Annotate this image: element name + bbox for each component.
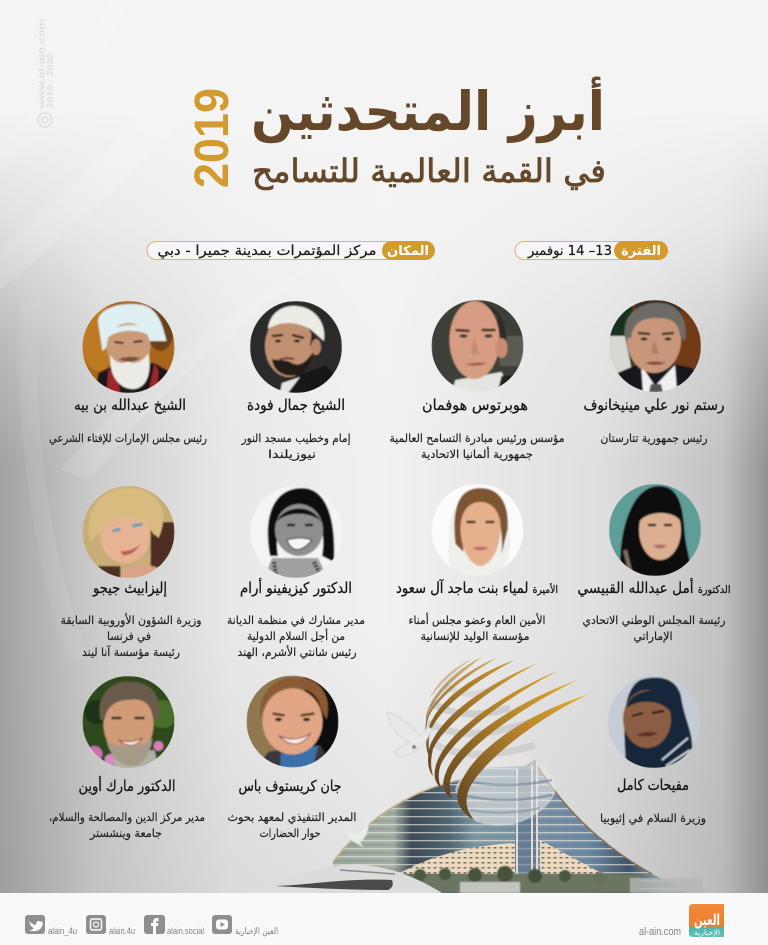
icon: dove large (387, 712, 433, 756)
name: مفيحات كامل (617, 776, 689, 794)
trees (400, 866, 702, 893)
globe white sphere overlay (428, 685, 555, 826)
portrait (609, 300, 701, 392)
description: رئيسة مؤسسة آنا ليند (82, 645, 180, 660)
description: مؤسس ورئيس مبادرة التسامح العالمية (390, 431, 564, 446)
description (49, 810, 205, 841)
name: الأميرة لمياء بنت ماجد آل سعود (396, 579, 558, 597)
name: إليزابيث جيجو (92, 579, 167, 597)
icon: instagram (86, 915, 106, 934)
portrait (608, 676, 700, 768)
twitter handle: alain_4u (48, 926, 77, 936)
logo: الإخبارية (694, 929, 720, 937)
portrait (609, 484, 701, 576)
speaker: Muferiat Kamil (600, 676, 706, 826)
watermark: 2019 - 2020 (45, 53, 55, 108)
description: الأمين العام وعضو مجلس أمناء (408, 612, 546, 628)
period pill: 13– 14 نوفمبر (527, 243, 612, 259)
description (60, 613, 202, 660)
instagram handle: alain.4u (109, 926, 135, 936)
building and globe artwork (262, 657, 702, 893)
logo: العين (694, 911, 720, 929)
name: الدكتور مارك أوين (78, 776, 176, 795)
description (390, 431, 564, 462)
portrait (432, 300, 524, 392)
portrait (246, 676, 338, 768)
location pill (147, 241, 435, 260)
portrait (432, 484, 524, 576)
description: مدير مشارك في منظمة الديانة (227, 613, 365, 628)
description: نيوزيلندا (268, 447, 316, 462)
description: جامعة وينشستر (89, 826, 162, 841)
description: رئيس مجلس الإمارات للإفتاء الشرعي (49, 431, 207, 446)
name: هوبرتوس هوفمان (422, 396, 528, 414)
speaker: Rustam Minnikhanov (584, 300, 724, 446)
yacht (262, 864, 442, 893)
description: رئيسة المجلس الوطني الاتحادي (582, 613, 726, 628)
description (582, 613, 726, 644)
description: رئيس جمهورية تتارستان (600, 431, 708, 446)
period pill: الفترة (621, 244, 661, 259)
speaker: Amal Al Qubaisi (578, 484, 730, 644)
icon: facebook (144, 915, 165, 934)
website: al-ain.com (639, 926, 681, 938)
period pill (515, 241, 668, 260)
portrait (82, 676, 176, 768)
icon: youtube (212, 915, 232, 934)
name: الشيخ عبدالله بن بيه (74, 396, 186, 414)
name: جان كريستوف باس (238, 777, 342, 795)
description: وزيرة السلام في إثيوبيا (600, 811, 706, 826)
description (228, 810, 356, 841)
heading line 1: أبرز المتحدثين (251, 76, 605, 143)
footer bar (0, 893, 768, 945)
speaker: Abdullah bin Bayyah (49, 301, 207, 446)
location pill: مركز المؤتمرات بمدينة جميرا - دبي (158, 243, 376, 259)
name: الدكتورة أمل عبدالله القبيسي (578, 578, 730, 598)
speaker: Elisabeth Guigou (60, 486, 202, 660)
speaker: Lamia bint Majed Al Saud (396, 484, 558, 644)
description: وزيرة الشؤون الأوروبية السابقة (60, 613, 202, 628)
speaker: Marc Owen (49, 676, 205, 841)
description (408, 612, 546, 644)
portrait (82, 486, 174, 578)
description: في فرنسا (107, 629, 151, 644)
facebook handle: alain.social (167, 926, 204, 936)
icon: dove small (344, 821, 369, 848)
title (186, 76, 606, 190)
speaker: Gamal Fouda (241, 301, 350, 462)
speaker: Hubertus Hoffmann (390, 300, 564, 462)
hotel building (333, 760, 690, 893)
description: مدير مركز الدين والمصالحة والسلام، (49, 810, 205, 825)
golden globe swooshes (425, 657, 590, 820)
year 2019: 2019 (186, 88, 239, 188)
heading line 2: في القمة العالمية للتسامح (252, 152, 606, 190)
description: إمام وخطيب مسجد النور (241, 431, 350, 446)
description: جمهورية ألمانيا الاتحادية (421, 446, 533, 462)
description: رئيس شانتي الأشرم، الهند (238, 645, 356, 660)
logo (689, 904, 724, 937)
portrait (80, 301, 174, 393)
youtube channel name: العين الإخبارية (235, 927, 278, 937)
description (241, 431, 350, 462)
portrait (250, 301, 342, 393)
watermark: www.al-ain.com (36, 19, 48, 110)
description (227, 613, 365, 660)
name: الشيخ جمال فودة (247, 396, 345, 414)
portrait (250, 486, 342, 578)
description: المدير التنفيذي لمعهد بحوث (228, 810, 356, 825)
description: مؤسسة الوليد للإنسانية (420, 629, 530, 644)
description: حوار الحضارات (260, 826, 320, 841)
location pill: المكان (387, 244, 429, 259)
icon: twitter (25, 915, 45, 934)
speaker: Jean-Christophe Bas (228, 676, 356, 841)
description: الإماراتي (634, 629, 672, 644)
watermark (36, 19, 55, 127)
name: الدكتور كيزيفينو أرام (240, 578, 352, 597)
speaker: Kezevino Aram (227, 486, 365, 660)
description: من أجل السلام الدولية (247, 628, 345, 644)
name: رستم نور علي مينيخانوف (584, 396, 724, 415)
